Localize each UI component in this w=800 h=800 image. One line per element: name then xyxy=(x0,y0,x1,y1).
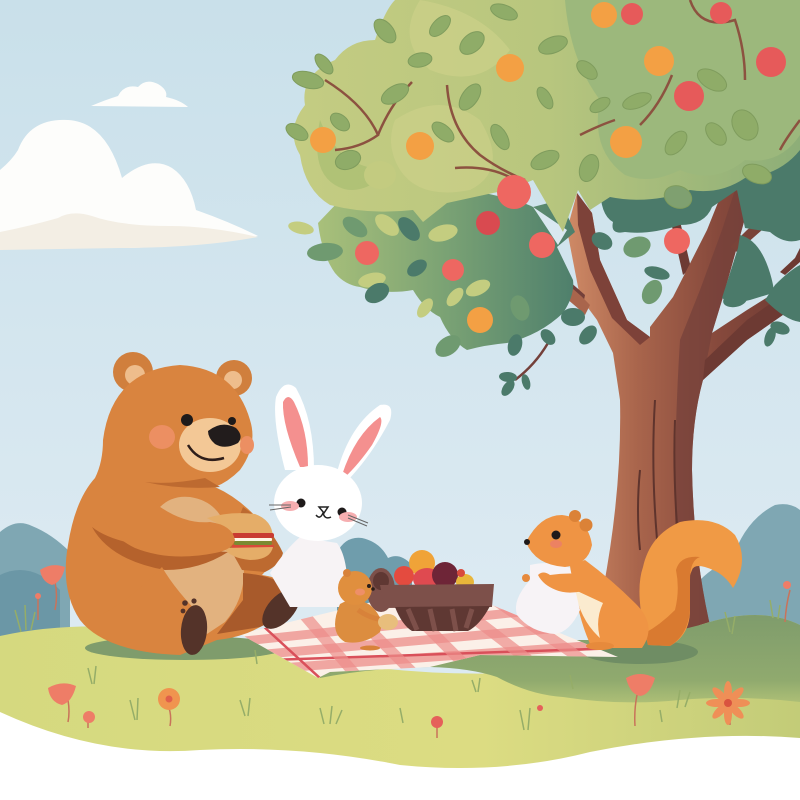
tree canopy xyxy=(283,0,800,398)
white sack xyxy=(516,563,580,634)
canopy: thin branches xyxy=(325,0,800,180)
picnic blanket xyxy=(235,600,620,680)
bear ears xyxy=(113,352,153,392)
shaded grass under tree xyxy=(320,615,800,702)
canopy: leaves lower dark xyxy=(361,213,791,398)
canopy: right dark foliage xyxy=(600,140,800,241)
small squirrel xyxy=(335,569,398,650)
bear nose xyxy=(208,425,241,447)
rabbit head xyxy=(274,465,362,541)
bear right leg xyxy=(217,573,290,634)
rabbit ears xyxy=(275,385,314,470)
canopy: leaves lower mid xyxy=(306,212,666,361)
bear body xyxy=(66,365,291,655)
squirrel head xyxy=(526,515,592,567)
right upper branch xyxy=(730,187,800,252)
bear xyxy=(66,352,307,656)
bear arm shadow xyxy=(92,527,228,570)
canopy: leaves upper xyxy=(283,1,774,212)
trunk main xyxy=(567,180,800,634)
bear arm and paw on sandwich xyxy=(100,491,235,557)
bear eyes xyxy=(181,414,193,426)
canopy: lower left foliage xyxy=(318,190,575,350)
squirrel arm xyxy=(538,572,595,593)
bear belly xyxy=(160,497,244,634)
sky gap in foliage xyxy=(533,207,567,245)
squirrel ground shadow xyxy=(582,640,698,664)
grass tufts xyxy=(15,600,780,730)
tree trunk and branches xyxy=(327,180,800,634)
curved lighter branch xyxy=(462,264,590,315)
food basket xyxy=(367,550,494,631)
bear mouth xyxy=(188,445,224,460)
squirrel body xyxy=(570,560,649,648)
big squirrel xyxy=(516,510,742,650)
canopy: apples red xyxy=(355,2,786,281)
left large branch xyxy=(445,201,585,310)
canopy: light upper foliage xyxy=(294,0,800,232)
squirrel tail xyxy=(639,520,742,646)
sandwich xyxy=(207,513,274,560)
small cloud xyxy=(91,82,188,107)
canopy: apples orange xyxy=(310,2,674,333)
branch behind xyxy=(671,221,691,275)
distant bushes xyxy=(0,504,800,640)
bear cheeks xyxy=(149,425,175,449)
bear paws xyxy=(179,604,209,656)
large cloud xyxy=(0,120,258,250)
bear right arm xyxy=(228,507,283,572)
bear ground shadow xyxy=(85,636,285,660)
bear muzzle xyxy=(179,418,241,472)
left horizontal branch xyxy=(327,231,508,253)
grassy foreground hill xyxy=(0,615,800,768)
rabbit xyxy=(269,385,391,607)
rabbit face xyxy=(296,498,306,508)
wildflowers xyxy=(35,565,791,738)
canopy: leaves lower light xyxy=(287,210,493,320)
rabbit body xyxy=(270,537,348,607)
squirrel foot xyxy=(586,642,614,650)
bear left thigh xyxy=(84,567,205,654)
white bottom margin xyxy=(0,690,800,800)
